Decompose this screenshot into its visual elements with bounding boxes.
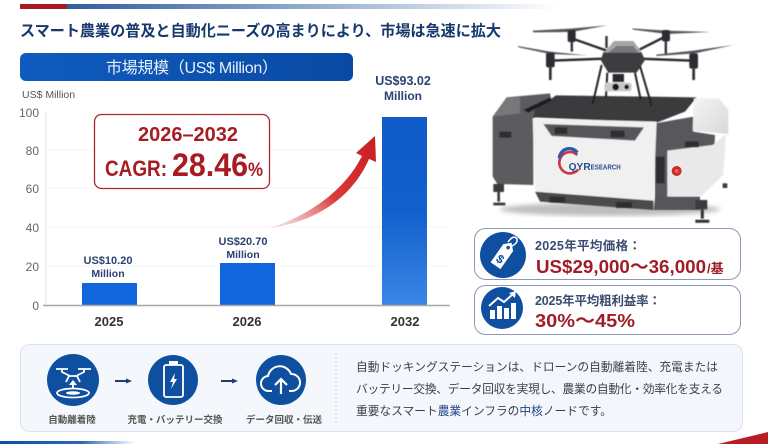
panel: average price bbox=[474, 228, 740, 280]
CAGR callout: % bbox=[248, 160, 263, 181]
y axis: 40 bbox=[26, 221, 39, 235]
label: automatic takeoff and landing: 自動離着陸 bbox=[48, 414, 96, 426]
bar 2026: US$20.70 bbox=[219, 236, 267, 248]
logo: QYR bbox=[569, 162, 591, 173]
logo bbox=[559, 149, 621, 173]
bar 2032 bbox=[375, 74, 431, 329]
icon: price tag: $ bbox=[493, 251, 507, 267]
y axis: 20 bbox=[26, 260, 39, 274]
stop button bbox=[672, 166, 682, 176]
feet bbox=[493, 183, 727, 221]
fuselage bbox=[601, 43, 645, 73]
price value: US$29,000～36,000 bbox=[536, 257, 706, 277]
CAGR callout: CAGR: bbox=[105, 156, 167, 181]
growth arrow bbox=[270, 136, 376, 228]
right white door bbox=[667, 134, 726, 197]
bar 2026 bbox=[219, 236, 275, 329]
icon: battery charging bbox=[148, 355, 198, 405]
CAGR callout: 28.46 bbox=[172, 147, 248, 183]
bar 2032: US$93.02 bbox=[375, 74, 431, 88]
description text: バッテリー交換、データ回収を実現し、農業の自動化・効率化を支える bbox=[356, 382, 723, 396]
bar 2025: US$10.20 bbox=[84, 255, 132, 267]
title: スマート農業の普及と自動化ニーズの高まりにより、市場は急速に拡大 bbox=[20, 22, 501, 40]
station body right bbox=[655, 117, 715, 198]
illustration: drone on docking station bbox=[493, 25, 733, 221]
front panel bbox=[533, 118, 657, 201]
bottom accent strip bbox=[0, 432, 768, 444]
chart header bar bbox=[20, 53, 353, 81]
camera gimbal bbox=[604, 74, 632, 91]
station deck bbox=[533, 95, 697, 123]
y axis: 0 bbox=[32, 299, 39, 313]
panel: gross margin bbox=[474, 286, 740, 334]
logo: ESEARCH bbox=[591, 164, 621, 171]
icon: automatic takeoff and landing bbox=[47, 354, 99, 406]
bar 2025: Million bbox=[91, 268, 125, 280]
icon: cloud upload bbox=[256, 355, 306, 405]
bar 2025 bbox=[82, 255, 137, 329]
label: charging and battery swap: 充電・バッテリー交換 bbox=[127, 414, 223, 426]
arrow 1 bbox=[115, 378, 132, 384]
arrow 2 bbox=[221, 378, 238, 384]
bar 2025: 2025 bbox=[95, 314, 123, 329]
bar 2032: 2032 bbox=[391, 314, 419, 329]
station body left bbox=[493, 93, 553, 185]
panel: market size chart bbox=[19, 53, 450, 329]
description text: 自動ドッキングステーションは、ドローンの自動離着陸、充電または bbox=[356, 360, 718, 374]
top accent strip bbox=[20, 4, 560, 9]
motors bbox=[546, 30, 698, 80]
ground shadow bbox=[500, 203, 720, 216]
drone bbox=[518, 25, 733, 106]
bar 2032: Million bbox=[384, 89, 422, 103]
arms bbox=[550, 37, 693, 61]
x axis bbox=[43, 304, 450, 306]
icon: growth chart bbox=[481, 287, 523, 329]
divider bbox=[335, 353, 337, 423]
y axis bbox=[19, 106, 450, 313]
panel: process and description bbox=[20, 344, 742, 432]
price label: 2025年平均価格： bbox=[535, 238, 641, 253]
price value: /基 bbox=[707, 261, 724, 276]
description text: 重要なスマート農業インフラの中核ノードです。 bbox=[356, 404, 612, 418]
CAGR callout: 2026–2032 bbox=[138, 124, 238, 146]
margin label: 2025年平均粗利益率： bbox=[535, 293, 661, 308]
label: data collection and transfer: データ回収・伝送 bbox=[246, 414, 322, 426]
y axis: 100 bbox=[19, 106, 39, 120]
CAGR callout bbox=[94, 114, 270, 188]
description text bbox=[356, 360, 723, 418]
landing gear bbox=[593, 65, 652, 106]
y axis: 60 bbox=[26, 182, 39, 196]
right top white cover bbox=[693, 98, 728, 134]
y axis unit label: US$ Million bbox=[22, 89, 75, 101]
bar 2026: Million bbox=[226, 249, 260, 261]
propellers bbox=[518, 25, 733, 56]
station artwork bbox=[493, 93, 728, 221]
bar 2026: 2026 bbox=[233, 314, 261, 329]
icon: price tag bbox=[480, 232, 526, 278]
y axis: 80 bbox=[26, 144, 39, 158]
chart header bar: 市場規模（US$ Million） bbox=[106, 59, 278, 77]
margin value: 30%～45% bbox=[535, 311, 635, 331]
